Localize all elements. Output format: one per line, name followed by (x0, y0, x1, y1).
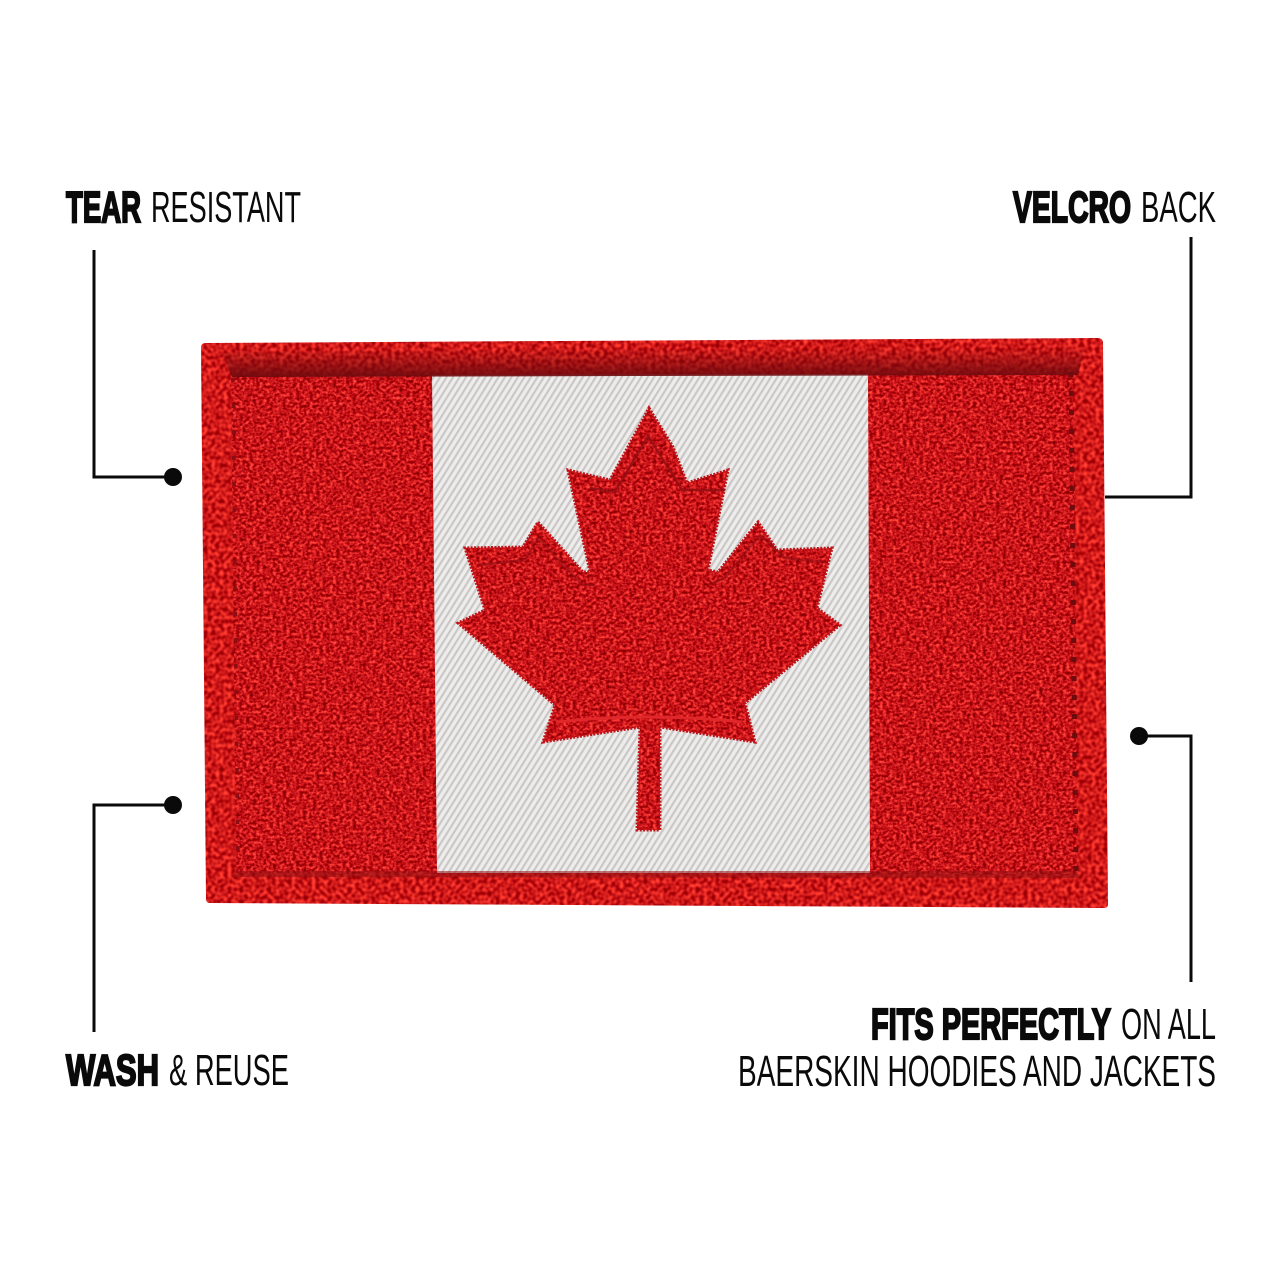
right red band (867, 373, 1077, 874)
leader line: tear (94, 250, 173, 477)
heading: velcro back: VELCRO (1013, 183, 1131, 232)
heading: wash and reuse: WASH (66, 1046, 159, 1095)
leader dot: fits (1130, 727, 1148, 745)
patch border (201, 338, 1108, 908)
leader line: velcro (1105, 237, 1191, 497)
heading: tear resistant (66, 183, 301, 232)
leader dot: tear (164, 468, 182, 486)
icon: maple leaf (458, 408, 840, 830)
heading: wash and reuse (66, 1046, 289, 1095)
heading: fits perfectly: FITS PERFECTLY (871, 1000, 1111, 1049)
right stitch line (1071, 372, 1076, 872)
white centre panel (432, 374, 870, 873)
left red band (231, 375, 438, 874)
leader line: wash (94, 805, 173, 1032)
top border shadow (222, 347, 1085, 377)
heading: fits perfectly: ON ALL (1121, 1000, 1216, 1049)
heading: wash and reuse: & REUSE (169, 1046, 289, 1095)
callout: velcro back (1013, 183, 1216, 497)
heading: fits perfectly (738, 1000, 1216, 1096)
bottom border shadow (232, 871, 1082, 878)
callout: fits perfectly (738, 727, 1216, 1096)
leader dot: wash (164, 796, 182, 814)
leader line: fits (1139, 736, 1191, 982)
heading: velcro back: BACK (1141, 183, 1216, 232)
patch: Canadian flag (201, 338, 1108, 908)
callout: wash and reuse (66, 796, 289, 1095)
heading: tear resistant: TEAR (66, 183, 141, 232)
callout: tear resistant (66, 183, 301, 486)
heading: tear resistant: RESISTANT (151, 183, 301, 232)
left stitch line (233, 378, 238, 870)
